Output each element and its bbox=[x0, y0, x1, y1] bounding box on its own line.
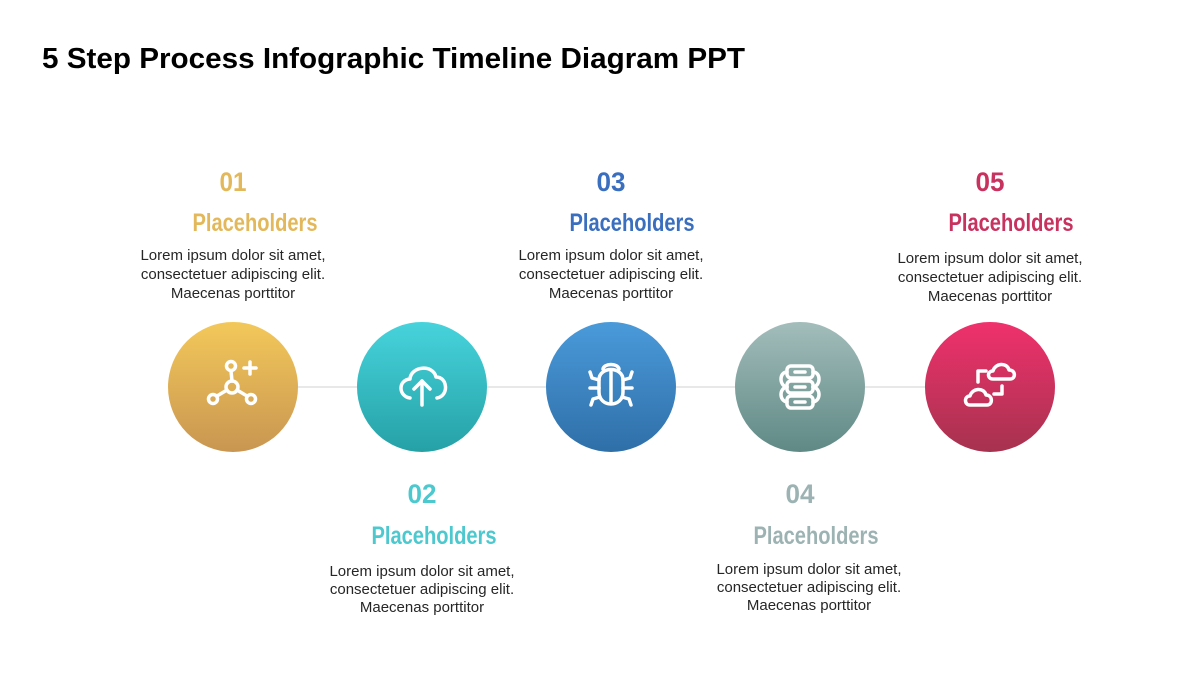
icon: server stack bbox=[781, 366, 819, 408]
step 3 circle bbox=[546, 322, 676, 452]
step 5 number: 05 bbox=[976, 167, 1004, 197]
step 4 circle bbox=[735, 322, 865, 452]
step 2 heading: Placeholders bbox=[372, 522, 496, 550]
step 3 text: Lorem ipsum dolor sit amet, bbox=[518, 247, 704, 264]
step 4 text: Maecenas porttitor bbox=[747, 597, 871, 614]
step 2 number: 02 bbox=[408, 479, 436, 509]
step 1 text: Maecenas porttitor bbox=[171, 285, 295, 302]
step 5 heading: Placeholders bbox=[948, 209, 1074, 237]
step 4 bbox=[716, 322, 902, 614]
step 2 circle bbox=[357, 322, 487, 452]
step 4 text: Lorem ipsum dolor sit amet, bbox=[716, 561, 902, 578]
step 4 number: 04 bbox=[786, 479, 814, 509]
icon: bug bbox=[590, 364, 632, 405]
step 3 text: Maecenas porttitor bbox=[549, 285, 673, 302]
step 1 number: 01 bbox=[220, 167, 246, 197]
step 1 bbox=[140, 167, 326, 452]
step 3 text: consectetuer adipiscing elit. bbox=[519, 266, 703, 283]
step 2 bbox=[329, 322, 515, 616]
step 3 bbox=[518, 167, 704, 452]
step 1 circle bbox=[168, 322, 298, 452]
step 4 text: consectetuer adipiscing elit. bbox=[717, 579, 901, 596]
step 5 text: consectetuer adipiscing elit. bbox=[898, 269, 1082, 286]
connector line bbox=[233, 386, 990, 388]
step 3 number: 03 bbox=[596, 167, 626, 197]
step 2 text: consectetuer adipiscing elit. bbox=[330, 581, 514, 598]
icon: cloud upload bbox=[401, 368, 446, 405]
step 1 text: Lorem ipsum dolor sit amet, bbox=[140, 247, 326, 264]
step 5 text: Lorem ipsum dolor sit amet, bbox=[897, 250, 1083, 267]
step 2 text: Maecenas porttitor bbox=[360, 599, 484, 616]
step 5 bbox=[897, 167, 1083, 452]
step 4 heading: Placeholders bbox=[754, 522, 878, 550]
step 3 heading: Placeholders bbox=[570, 209, 694, 237]
step 1 text: consectetuer adipiscing elit. bbox=[141, 266, 325, 283]
step 5 circle bbox=[925, 322, 1055, 452]
step 1 heading: Placeholders bbox=[192, 209, 318, 237]
icon: network nodes bbox=[208, 362, 256, 404]
step 2 text: Lorem ipsum dolor sit amet, bbox=[329, 563, 515, 580]
icon: cloud transfer bbox=[966, 364, 1014, 405]
title: 5 Step Process Infographic Timeline Diagram PPT bbox=[42, 43, 745, 75]
step 5 text: Maecenas porttitor bbox=[928, 288, 1052, 305]
